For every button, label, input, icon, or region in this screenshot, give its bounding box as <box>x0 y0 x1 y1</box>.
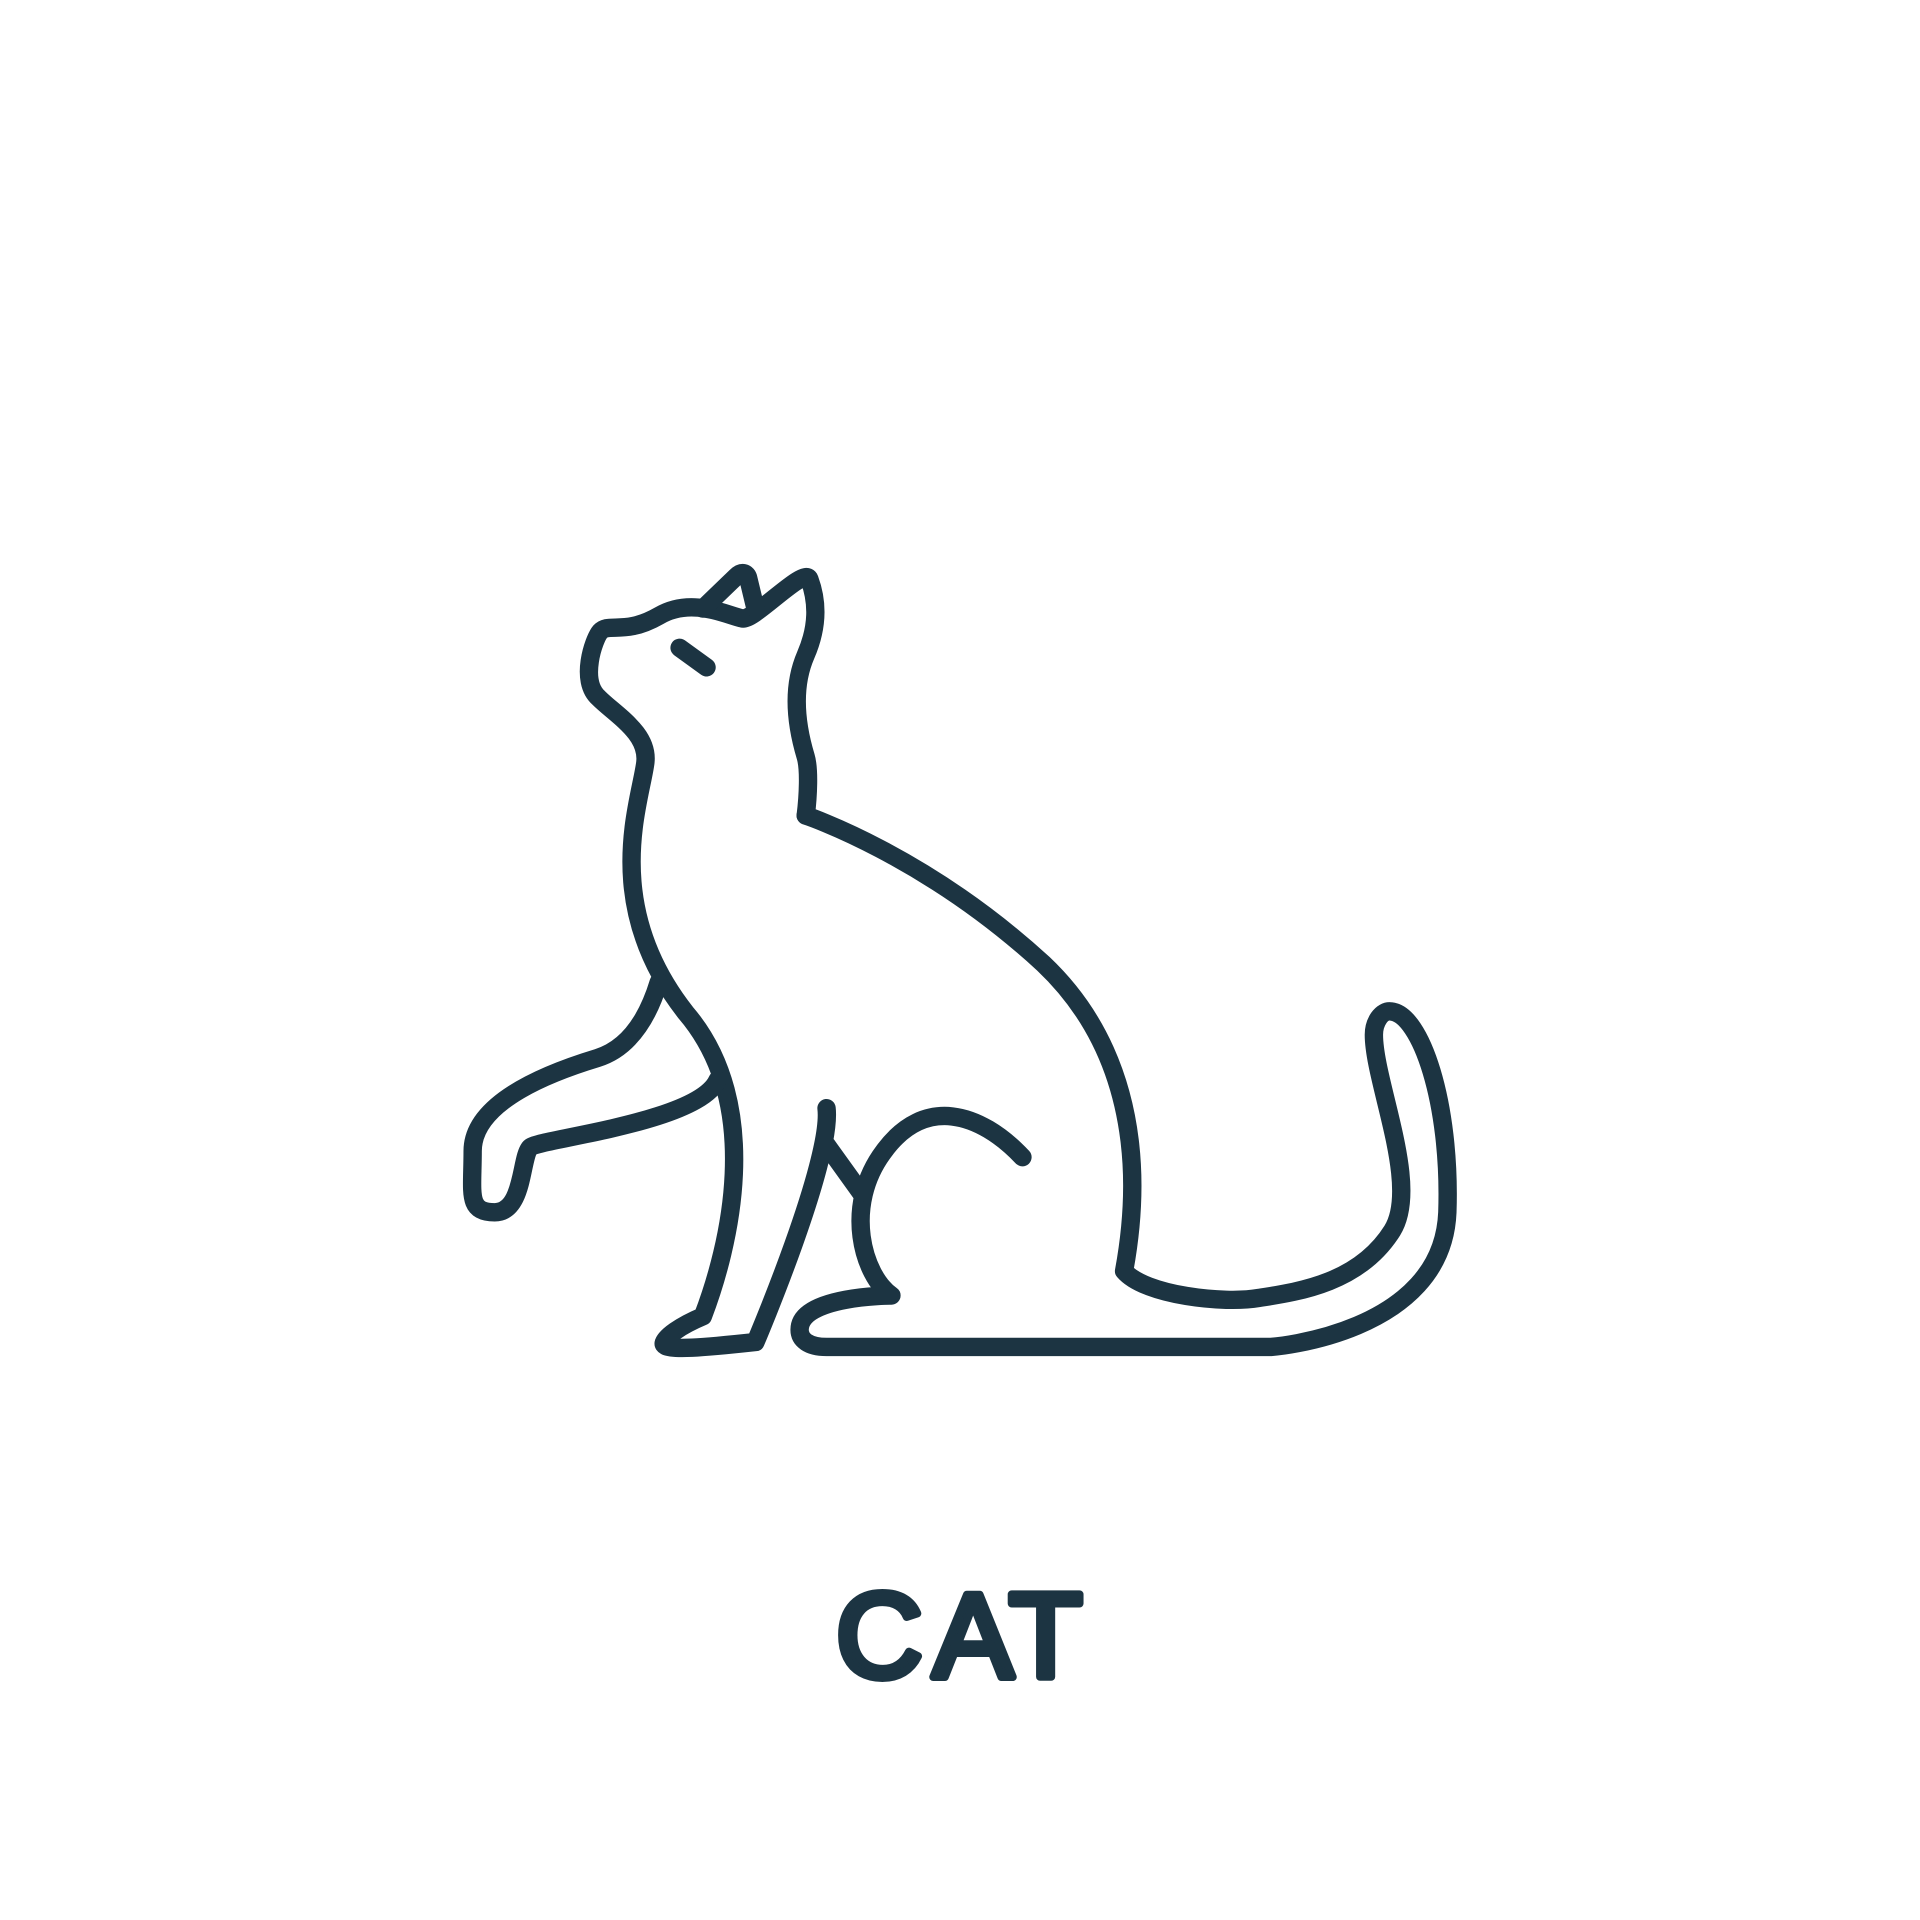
ear <box>703 573 756 609</box>
cat back, tail and base outline <box>800 816 1448 1347</box>
raised front paw <box>472 982 718 1212</box>
title: CAT <box>836 1569 1082 1703</box>
eye <box>680 648 707 667</box>
icon: cat line drawing <box>472 573 1448 1348</box>
thigh line <box>827 1145 861 1193</box>
cat head, chest and front leg outline <box>589 577 827 1348</box>
